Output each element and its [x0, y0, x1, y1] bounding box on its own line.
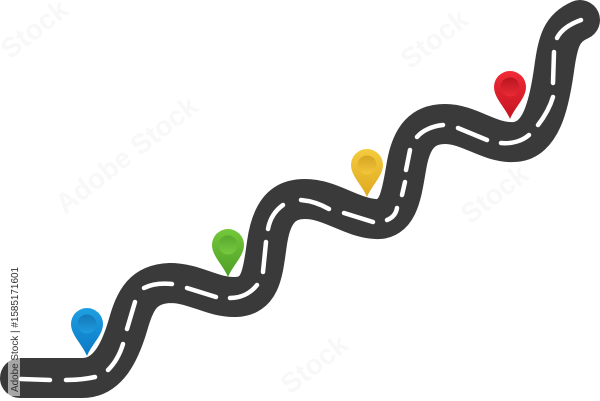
- pin: green: [212, 229, 244, 277]
- faint stock watermarks: Adobe Stock: [50, 90, 204, 220]
- pin: blue: [71, 308, 103, 356]
- faint stock watermarks: Stock: [275, 328, 354, 400]
- watermark id text: Adobe Stock | #1585171601: [9, 267, 21, 392]
- pin: red: [494, 71, 526, 119]
- faint stock watermarks: Stock: [455, 158, 534, 230]
- faint stock watermarks: Stock: [395, 3, 474, 75]
- pin: yellow: [351, 149, 383, 197]
